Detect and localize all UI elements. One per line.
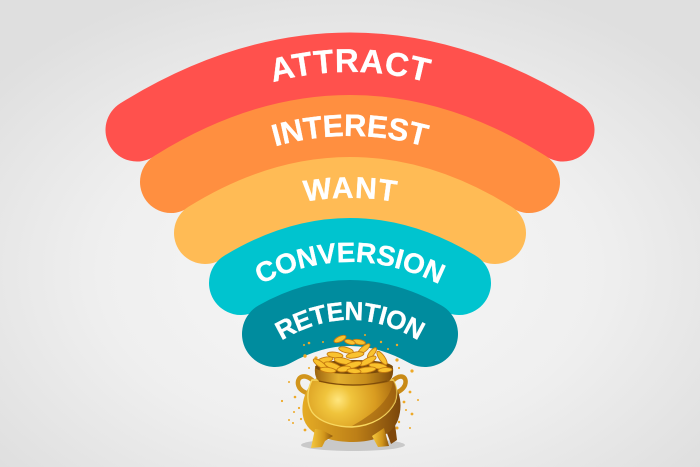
back right foot [385,424,397,444]
rim opening [315,360,393,374]
sparkles [281,334,419,431]
label: attract: ATTRACT [274,49,432,82]
pot bowl [308,380,397,427]
band: interest [171,126,529,182]
pot body [302,376,400,442]
bowl shade [352,380,397,426]
band: retention [275,313,425,334]
pot shadow [301,439,405,451]
band: conversion [241,250,459,283]
band: want [205,188,495,233]
pot rim [315,368,393,386]
label: want: WANT [302,177,398,201]
label: retention: RETENTION [274,302,426,340]
left handle [298,376,316,394]
band: attract [137,64,563,130]
right foot [372,428,389,447]
icon: pot of gold [281,334,419,451]
label: conversion: CONVERSION [256,242,446,284]
left foot [311,429,333,448]
coins [312,334,392,374]
label: interest: INTEREST [271,114,430,146]
right handle [390,377,406,394]
